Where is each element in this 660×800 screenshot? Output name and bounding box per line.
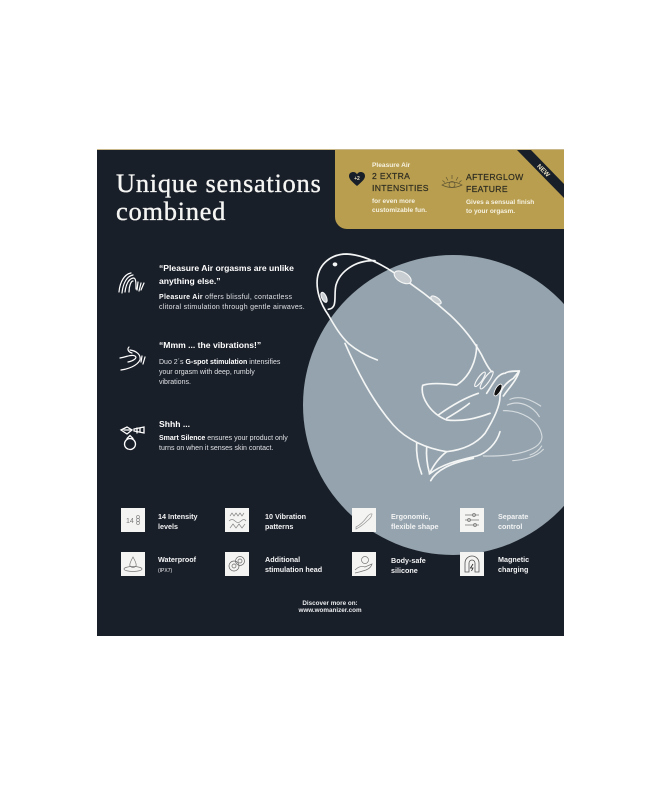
feature: ergonomic shape: flexible shape (391, 522, 439, 531)
heading: unique sensations combined (116, 168, 321, 226)
icon: afterglow sun (442, 175, 462, 188)
block: smart silence: Smart Silence ensures your product only (159, 434, 288, 442)
text: pleasure air feature: 2 EXTRA (372, 171, 410, 181)
circle: blue grey backdrop (303, 255, 603, 555)
feature: magnetic charging: charging (498, 565, 528, 574)
footer: website link: www.womanizer.com (298, 607, 362, 614)
icon: vibrations hand (119, 346, 146, 371)
text: afterglow feature: AFTERGLOW (466, 172, 524, 182)
feature: vibration patterns: patterns (265, 522, 293, 531)
text: pleasure air feature: INTENSITIES (372, 182, 429, 192)
air waves (483, 398, 543, 461)
block: pleasure air: anything else.” (159, 276, 221, 286)
panel: gold new features (335, 150, 564, 229)
feature: magnetic charging: Magnetic (498, 555, 529, 564)
feature: vibration patterns (225, 508, 306, 532)
text: pleasure air feature (372, 162, 429, 214)
feature: stimulation head (225, 552, 322, 576)
block: vibrations: vibrations. (159, 379, 191, 386)
text: afterglow feature: Gives a sensual finish (466, 199, 534, 206)
feature: ergonomic shape: Ergonomic, (391, 512, 431, 521)
illustration: product line art (316, 253, 544, 482)
block: smart silence (159, 419, 288, 452)
ribbon: new: NEW (535, 163, 552, 179)
block: smart silence: Shhh ... (159, 419, 190, 429)
feature: separate control (460, 508, 528, 532)
text: pleasure air feature: for even more (372, 198, 415, 205)
block: vibrations (159, 340, 280, 386)
feature: 14 intensity levels: 14 Intensity (158, 512, 198, 521)
feature: 14 intensity levels: levels (158, 522, 178, 531)
feature: separate control: control (498, 522, 522, 531)
footer: website link: Discover more on: (302, 600, 358, 607)
feature: 14 intensity levels: 14 (126, 518, 134, 525)
feature: body-safe silicone: silicone (391, 566, 418, 575)
feature: body-safe silicone: Body-safe (391, 556, 426, 565)
panel: dark background (97, 150, 564, 636)
block: pleasure air: clitoral stimulation through gentle airwaves. (159, 304, 305, 311)
feature: body-safe silicone (352, 552, 426, 576)
feature: ergonomic shape (352, 508, 439, 532)
icon: heart plus two: +2 (354, 176, 360, 182)
heading: unique sensations combined: Unique sensations (116, 168, 321, 198)
block: vibrations: Duo 2´s G-spot stimulation intensifies (159, 358, 280, 366)
block: pleasure air: “Pleasure Air orgasms are unlike (159, 263, 294, 273)
footer: website link (298, 600, 362, 614)
block: vibrations: “Mmm ... the vibrations!” (159, 340, 261, 350)
text: afterglow feature: to your orgasm. (466, 208, 515, 214)
feature: vibration patterns: 10 Vibration (265, 512, 306, 521)
feature: magnetic charging (460, 552, 529, 576)
feature: stimulation head: stimulation head (265, 565, 322, 574)
text: pleasure air feature: Pleasure Air (372, 162, 410, 169)
block: pleasure air (159, 263, 305, 311)
feature: 14 intensity levels (121, 508, 198, 532)
text: afterglow feature (466, 172, 534, 214)
feature: waterproof (121, 552, 196, 576)
external handle outline (317, 254, 519, 481)
feature: waterproof: (IPX7) (158, 568, 172, 574)
icon: heart plus two (349, 172, 365, 186)
block: smart silence: turns on when it senses skin contact. (159, 445, 273, 452)
icon: pleasure air (118, 272, 145, 294)
text: pleasure air feature: customizable fun. (372, 206, 427, 214)
block: vibrations: your orgasm with deep, rumbly (159, 369, 255, 376)
icon: smart silence (120, 426, 145, 450)
block: pleasure air: Pleasure Air offers blissful, contactless (159, 294, 292, 301)
heading: unique sensations combined: combined (116, 196, 226, 226)
button details (320, 262, 504, 397)
text: afterglow feature: FEATURE (466, 184, 508, 194)
feature: stimulation head: Additional (265, 555, 300, 564)
ribbon: new (517, 150, 564, 198)
feature: separate control: Separate (498, 512, 528, 521)
feature: waterproof: Waterproof (158, 555, 196, 564)
